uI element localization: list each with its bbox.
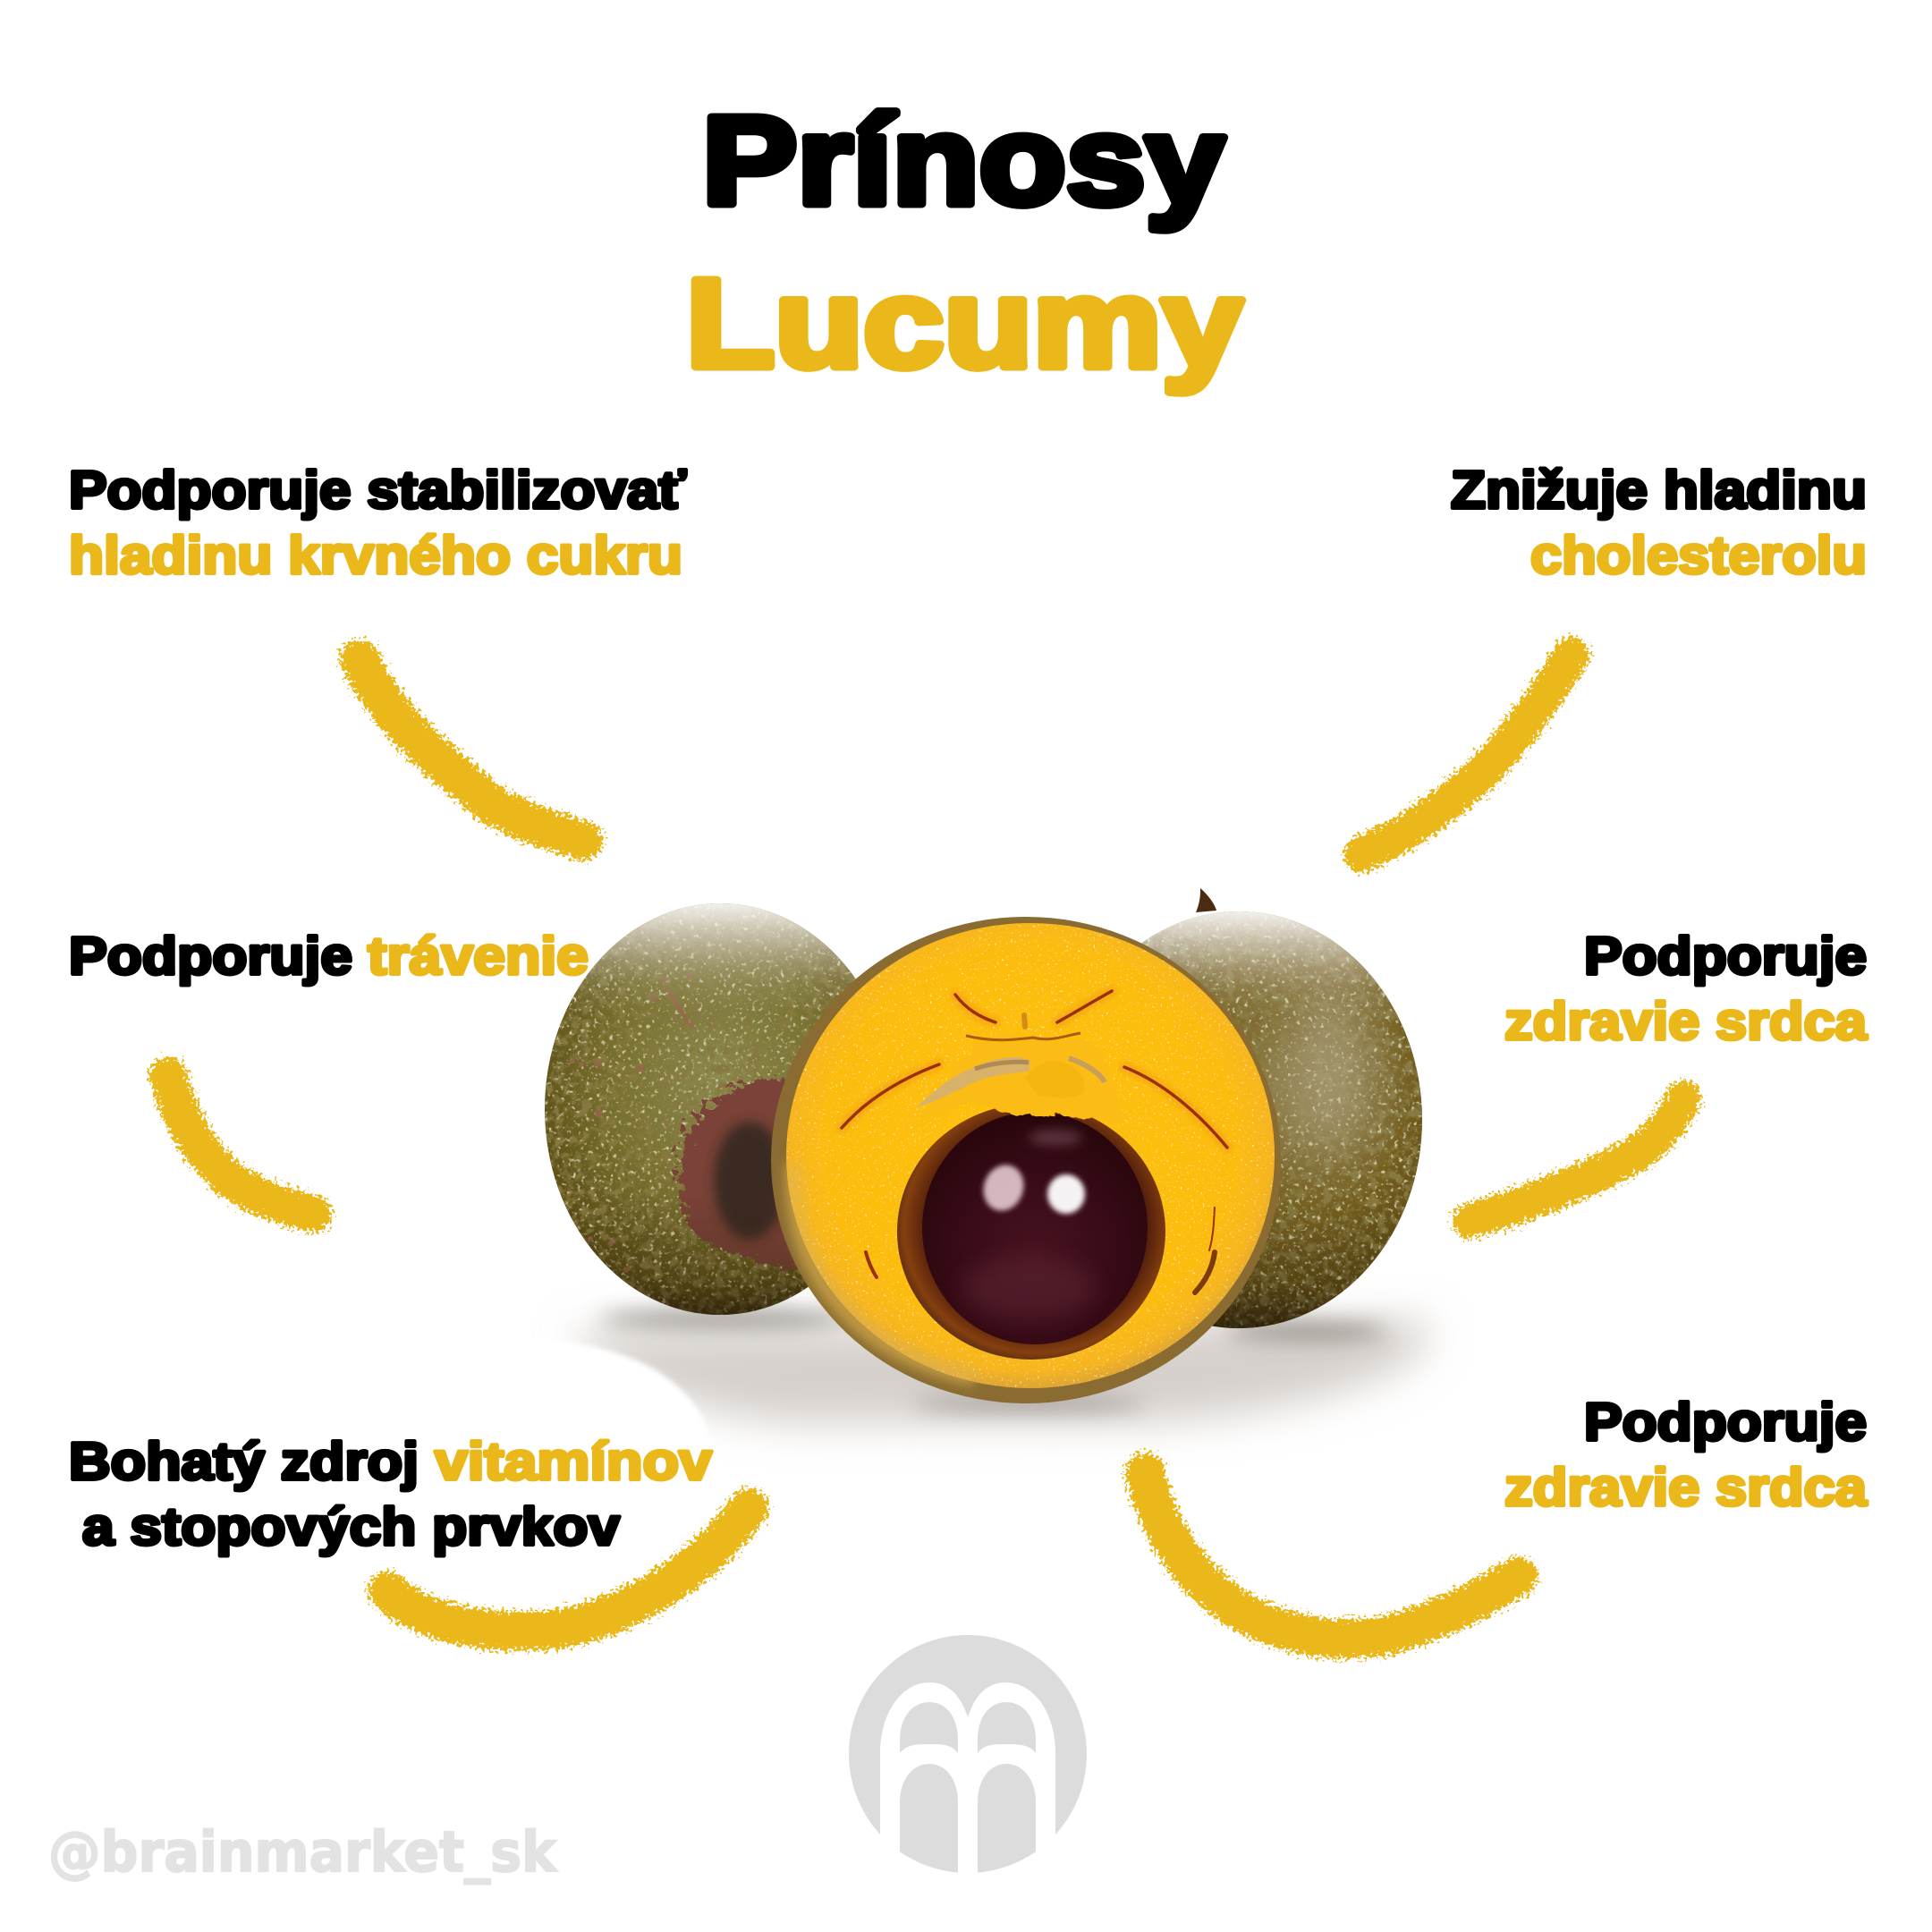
text block: vitamins: a stopových prvkov bbox=[82, 1497, 620, 1556]
title line: Lucumy: Lucumy bbox=[686, 252, 1242, 394]
logo white m shape bbox=[880, 1682, 1055, 1878]
text block: heart health: zdravie srdca bbox=[1504, 992, 1868, 1051]
text block: cholesterol: cholesterolu bbox=[1530, 526, 1867, 585]
text block: heart health bottom: Podporuje bbox=[1584, 1393, 1867, 1452]
seed highlights bbox=[962, 1130, 1096, 1319]
right whole fruit bbox=[1141, 888, 1422, 1328]
logo upper windows bbox=[900, 1702, 958, 1753]
seed cavity bbox=[897, 1104, 1165, 1360]
pale fibers bbox=[916, 1057, 1030, 1107]
text block: heart health: Podporuje bbox=[1584, 927, 1867, 986]
halved fruit bbox=[771, 917, 1281, 1403]
slits bbox=[842, 991, 1227, 1292]
text block: vitamins bbox=[69, 1432, 712, 1556]
seed bbox=[922, 1112, 1148, 1344]
watermark handle: @brainmarket_sk bbox=[48, 1819, 558, 1885]
text block: blood sugar: hladinu krvného cukru bbox=[69, 526, 682, 585]
text block: vitamins: Bohatý zdroj bbox=[69, 1432, 419, 1491]
text block: heart health bbox=[1504, 927, 1868, 1051]
title line: Prínosy: Prínosy bbox=[702, 89, 1224, 231]
flesh bbox=[786, 923, 1275, 1388]
logo bbox=[849, 1635, 1087, 1878]
flesh pale band bbox=[794, 1163, 975, 1377]
text block: digestion bbox=[69, 927, 589, 986]
text block: heart health bottom: zdravie srdca bbox=[1504, 1458, 1868, 1517]
text block: blood sugar: Podporuje stabilizovať bbox=[69, 461, 687, 520]
ground shadow bbox=[447, 1309, 1428, 1503]
skin specks bbox=[570, 972, 693, 1273]
brush arc: top right bbox=[1361, 655, 1572, 854]
text block: blood sugar bbox=[69, 461, 687, 585]
left whole fruit bbox=[545, 903, 856, 1315]
photo: lucuma fruits bbox=[447, 888, 1428, 1503]
text block: vitamins: vitamínov bbox=[435, 1432, 712, 1491]
brush arc: top left bbox=[360, 659, 583, 841]
calyx scar bbox=[680, 1077, 796, 1270]
brush arc: middle left bbox=[168, 1076, 313, 1214]
fissure bbox=[966, 1033, 1080, 1040]
text block: cholesterol: Znižuje hladinu bbox=[1451, 461, 1867, 520]
brush arc: bottom right bbox=[1145, 1472, 1518, 1639]
brush arc: bottom left bbox=[388, 1508, 749, 1631]
flesh cap bbox=[912, 1034, 1123, 1123]
flesh core above seed bbox=[912, 1033, 1123, 1123]
text block: digestion: Podporuje bbox=[69, 927, 352, 986]
text block: cholesterol bbox=[1451, 461, 1867, 585]
logo lower windows bbox=[900, 1764, 958, 1878]
text block: digestion: trávenie bbox=[368, 927, 589, 986]
brush arc: middle right bbox=[1470, 1098, 1683, 1221]
fruit tip bbox=[1196, 888, 1216, 912]
rind bbox=[771, 917, 1281, 1403]
text block: heart health bottom bbox=[1504, 1393, 1868, 1517]
yellow lump bbox=[1025, 1061, 1085, 1098]
title bbox=[686, 89, 1242, 394]
